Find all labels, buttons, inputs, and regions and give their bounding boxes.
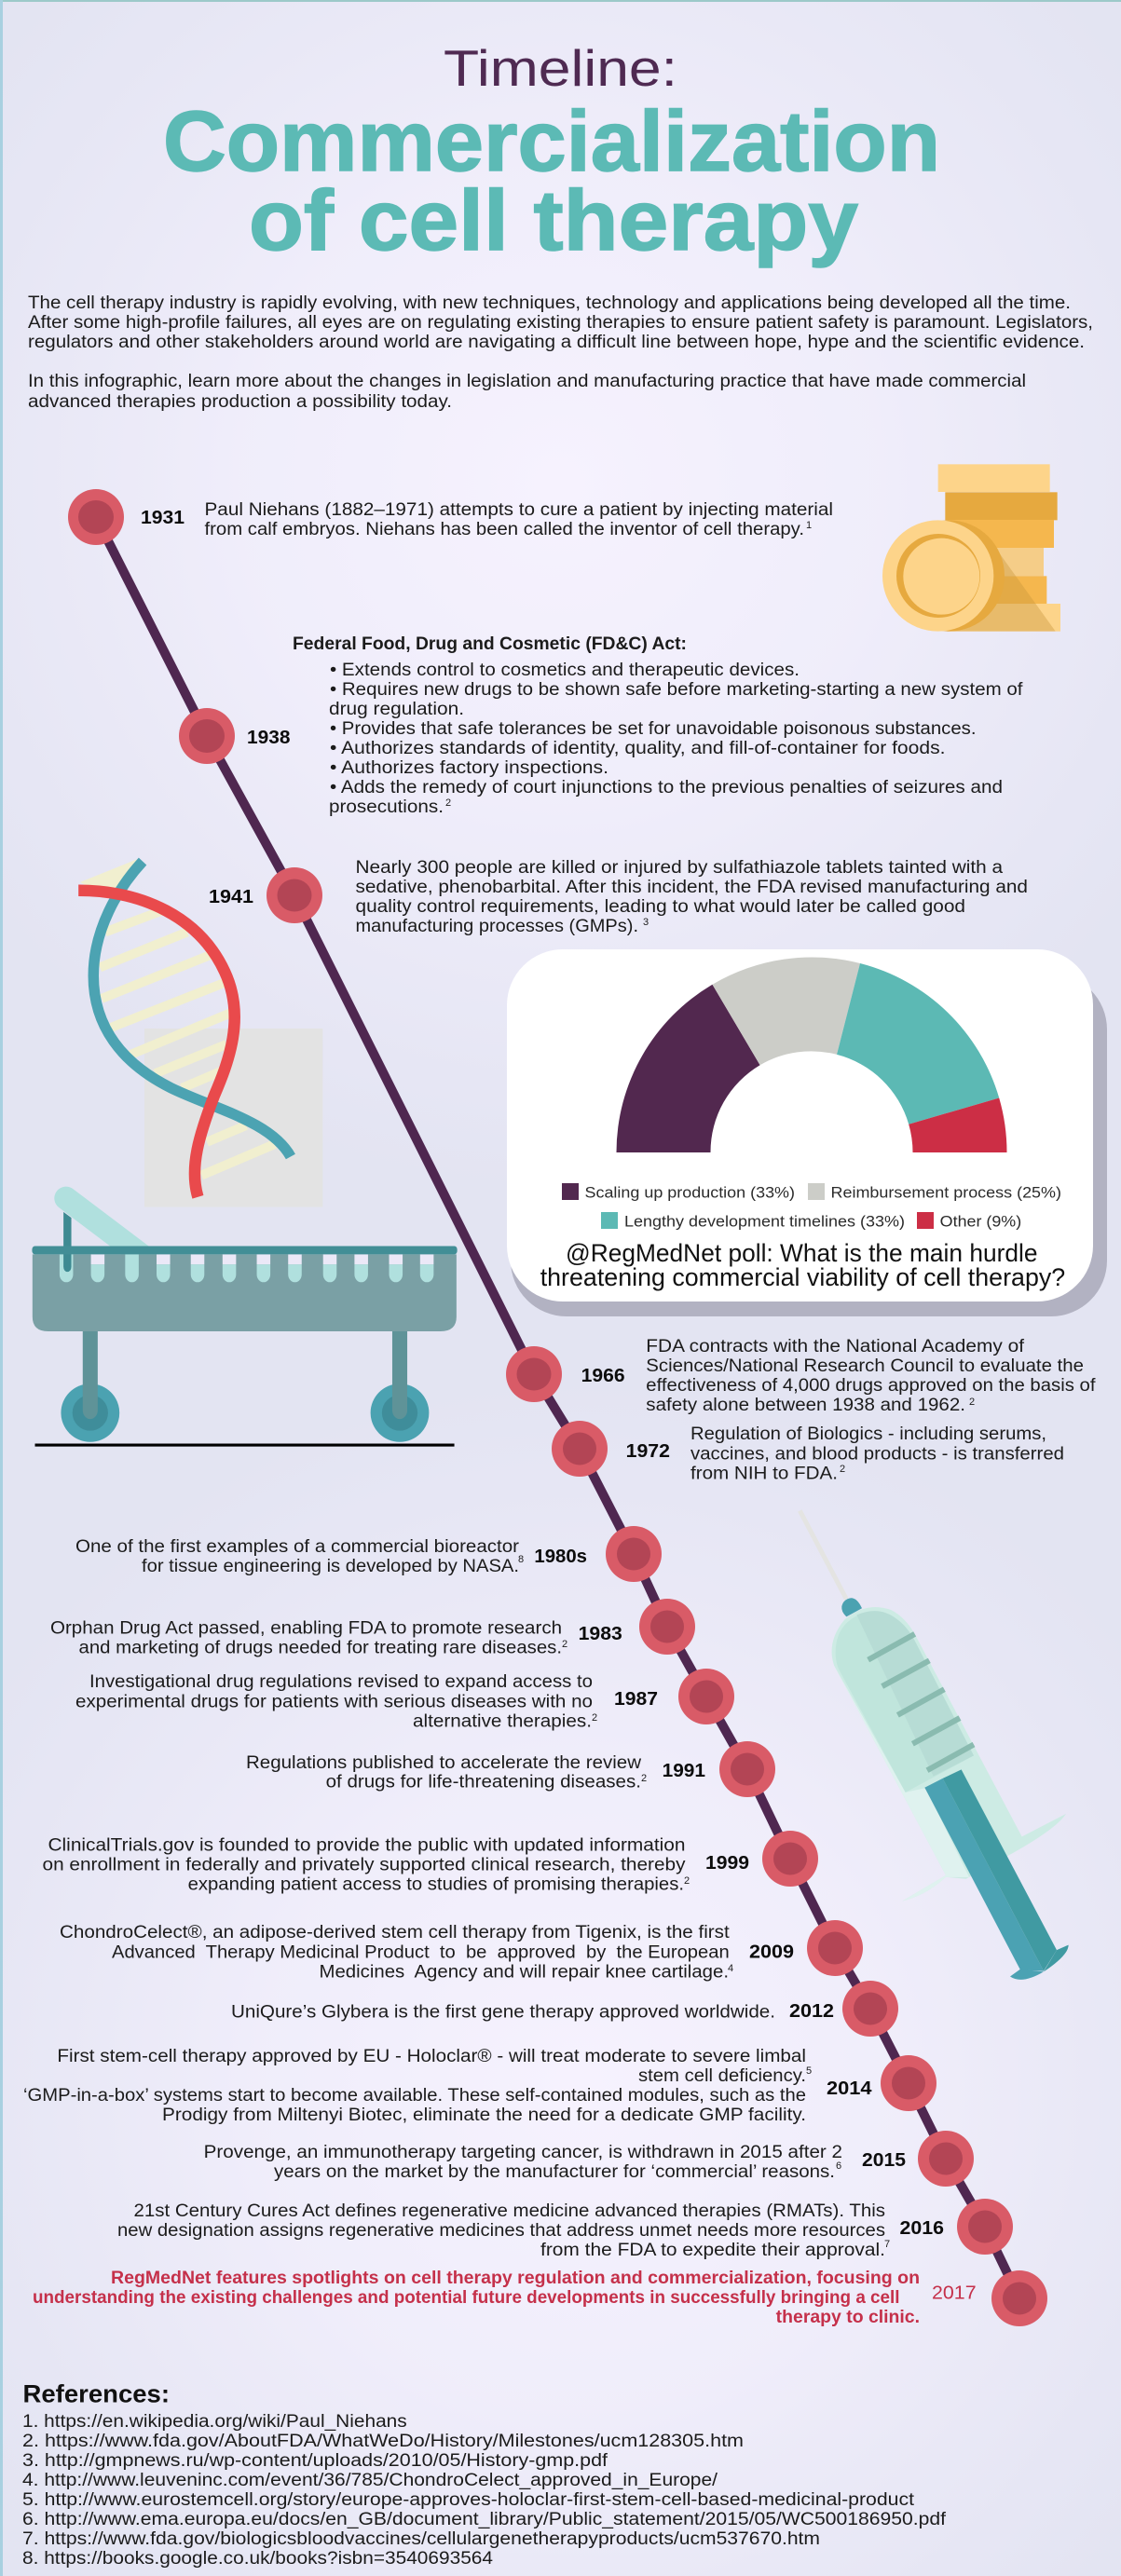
event: 1972 <box>552 1421 1064 1483</box>
event: 1966 <box>506 1337 1096 1415</box>
event: 2017: therapy to clinic. <box>776 2308 920 2327</box>
reference list: 1. https://en.wikipedia.org/wiki/Paul_Niehans <box>22 2412 407 2432</box>
event: 1983: and marketing of drugs needed for treating rare diseases. <box>78 1638 562 1658</box>
event: 2016: 7 <box>884 2239 890 2250</box>
event: 2009: 4 <box>728 1963 733 1974</box>
event: 2017: 2017 <box>932 2283 977 2304</box>
event: 1980s: One of the first examples of a commercial bioreactor <box>75 1537 520 1557</box>
icon: coins <box>882 464 1060 632</box>
event: 1983 <box>50 1599 695 1658</box>
event: 1972: 1972 <box>626 1441 670 1462</box>
event: 1999: expanding patient access to studies of promising therapies. <box>188 1875 684 1895</box>
title: of cell therapy <box>249 173 858 268</box>
event: 1931: from calf embryos. Niehans has been called the inventor of cell therapy. <box>205 520 804 539</box>
node 1931 <box>68 489 124 545</box>
chart legend: Other (9%) <box>940 1213 1021 1230</box>
event: 1972: 2 <box>840 1464 845 1475</box>
intro text: After some high-profile failures, all eyes are on regulating existing therapies to ensure patient safety is paramount. Legislators, <box>28 313 1093 333</box>
event: 2014 <box>23 2047 936 2125</box>
event: 1991 <box>246 1741 775 1797</box>
event: 1980s: for tissue engineering is developed by NASA. <box>142 1557 519 1576</box>
node 2015 <box>918 2131 974 2187</box>
intro text: regulators and other stakeholders around world are navigating a difficult line between hope, hype and the scientific evidence. <box>28 333 1085 352</box>
event: 1938 FD&C Act: • Requires new drugs to be shown safe before marketing-starting a new system of <box>330 680 1023 700</box>
event: 1991: Regulations published to accelerate the review <box>246 1753 641 1773</box>
event: 1966: 2 <box>969 1397 975 1408</box>
references heading: References: <box>22 2379 170 2407</box>
intro text: advanced therapies production a possibility today. <box>28 392 452 412</box>
reference list: 4. http://www.leuveninc.com/event/36/785/ChondroCelect_approved_in_Europe/ <box>22 2471 718 2490</box>
event: 1931: 1 <box>806 520 812 531</box>
event: 1999: 2 <box>684 1875 690 1887</box>
event: 1966: safety alone between 1938 and 1962. <box>646 1396 965 1415</box>
poll question: @RegMedNet poll: What is the main hurdle <box>566 1239 1038 1267</box>
event: 2009: Advanced Therapy Medicinal Product to be approved by the European <box>112 1942 730 1962</box>
event: 2012 <box>231 1981 898 2037</box>
chart legend: Reimbursement process (25%) <box>831 1183 1061 1202</box>
node 2017 <box>991 2270 1047 2326</box>
reference list <box>22 2412 947 2569</box>
node 2014 <box>881 2055 936 2111</box>
event: 2009: ChondroCelect®, an adipose-derived stem cell therapy from Tigenix, is the first <box>60 1923 730 1942</box>
event: 2015: Provenge, an immunotherapy targeting cancer, is withdrawn in 2015 after 2 <box>204 2143 842 2162</box>
event: 1938 FD&C Act: • Adds the remedy of court injunctions to the previous penalties of seizures and <box>330 778 1003 797</box>
node 1980s <box>606 1526 662 1582</box>
chart legend: Scaling up production (33%) <box>585 1183 795 1202</box>
node 1941 <box>267 867 322 923</box>
event: 1972: vaccines, and blood products - is transferred <box>690 1444 1064 1465</box>
icon: syringe <box>800 1511 1069 1980</box>
event: 1991: 2 <box>641 1773 647 1784</box>
event: 2014: 5 <box>806 2065 812 2077</box>
chart legend: Lengthy development timelines (33%) <box>624 1213 905 1230</box>
event: 1941: Nearly 300 people are killed or injured by sulfathiazole tablets tainted with a <box>356 858 1003 878</box>
event: 1938 FD&C Act: • Provides that safe tolerances be set for unavoidable poisonous substances. <box>330 719 977 739</box>
event: 1938 FD&C Act: • Authorizes standards of identity, quality, and fill-of-container for foods. <box>330 739 945 758</box>
event: 1980s: 8 <box>518 1554 524 1565</box>
event: 1983: 2 <box>562 1639 567 1650</box>
event: 1991: 1991 <box>663 1761 705 1781</box>
event: 1938 FD&C Act: 2 <box>445 797 451 809</box>
event: 1987 <box>75 1669 734 1731</box>
panel: poll chart <box>507 949 1107 1316</box>
event: 1987: alternative therapies. <box>413 1712 592 1731</box>
event: 1966: 1966 <box>581 1366 625 1386</box>
event: 2014: stem cell deficiency. <box>638 2066 806 2086</box>
event: 1941: sedative, phenobarbital. After this incident, the FDA revised manufacturing and <box>356 878 1028 897</box>
event: 2012: 2012 <box>789 2001 834 2022</box>
poll question <box>540 1239 1065 1291</box>
reference list: 3. http://gmpnews.ru/wp-content/uploads/2010/05/History-gmp.pdf <box>22 2451 608 2471</box>
node 1966 <box>506 1346 562 1402</box>
node 1999 <box>762 1831 818 1887</box>
event: 1938 FD&C Act <box>179 634 1023 817</box>
event: 2015 <box>204 2131 974 2187</box>
event: 2015: years on the market by the manufacturer for ‘commercial’ reasons. <box>274 2162 835 2182</box>
event: 1938 FD&C Act: prosecutions. <box>329 797 444 817</box>
event: 1999: ClinicalTrials.gov is founded to provide the public with updated information <box>48 1835 686 1855</box>
event: 1966: FDA contracts with the National Academy of <box>646 1337 1025 1356</box>
icon: hospital stretcher <box>32 1198 458 1447</box>
event: 1941: 1941 <box>209 887 253 907</box>
event: 1987: Investigational drug regulations revised to expand access to <box>89 1672 593 1692</box>
event: 2014: Prodigy from Miltenyi Biotec, eliminate the need for a dedicate GMP facility. <box>162 2106 806 2125</box>
node 2009 <box>807 1920 863 1976</box>
event: 1991: of drugs for life-threatening diseases. <box>326 1773 641 1792</box>
event: 1931: 1931 <box>141 508 185 528</box>
reference list: 8. https://books.google.co.uk/books?isbn=3540693564 <box>22 2549 493 2569</box>
event: 2014: First stem-cell therapy approved by EU - Holoclar® - will treat moderate to severe limbal <box>57 2047 806 2066</box>
event: 1938 FD&C Act: 1938 <box>247 728 291 748</box>
event: 1941: 3 <box>643 917 649 928</box>
event: 1983: Orphan Drug Act passed, enabling FDA to promote research <box>50 1619 562 1638</box>
event: 1966: effectiveness of 4,000 drugs approved on the basis of <box>646 1376 1096 1396</box>
title: Timeline: <box>444 39 677 97</box>
timeline line <box>96 517 1019 2298</box>
node 1972 <box>552 1421 608 1477</box>
event: 1931: Paul Niehans (1882–1971) attempts to cure a patient by injecting material <box>205 500 833 520</box>
event: 1938 FD&C Act: Federal Food, Drug and Cosmetic (FD&C) Act: <box>293 634 687 654</box>
event: 1938 FD&C Act: • Extends control to cosmetics and therapeutic devices. <box>330 661 800 680</box>
event: 2017 <box>33 2269 1047 2327</box>
event: 1999: 1999 <box>705 1853 749 1874</box>
event: 2012: UniQure’s Glybera is the first gene therapy approved worldwide. <box>231 2003 775 2023</box>
poll question: threatening commercial viability of cell therapy? <box>540 1263 1065 1291</box>
event: 2015: 2015 <box>862 2150 906 2171</box>
event: 1987: experimental drugs for patients with serious diseases with no <box>75 1692 593 1712</box>
icon: DNA helix <box>78 858 322 1207</box>
node 2012 <box>842 1981 898 2037</box>
chart legend <box>562 1183 1061 1230</box>
intro text: The cell therapy industry is rapidly evolving, with new techniques, technology and applications being developed all the time. <box>28 293 1071 313</box>
event: 1941: manufacturing processes (GMPs). <box>356 917 638 936</box>
event: 2017: RegMedNet features spotlights on cell therapy regulation and commercialization, focusing on <box>111 2269 920 2288</box>
event: 2009 <box>60 1920 863 1983</box>
event: 1941 <box>209 858 1028 936</box>
event: 1931 <box>68 489 833 545</box>
event: 2017: understanding the existing challenges and potential future developments in successfully bringing a cell <box>33 2288 900 2308</box>
event: 2015: 6 <box>836 2160 841 2172</box>
event: 2014: ‘GMP-in-a-box’ systems start to become available. These self-contained modules, such as the <box>23 2086 806 2106</box>
event: 1972: from NIH to FDA. <box>690 1465 838 1483</box>
node 1983 <box>639 1599 695 1655</box>
event: 1972: Regulation of Biologics - including serums, <box>690 1424 1046 1444</box>
event: 1938 FD&C Act: drug regulation. <box>329 700 464 719</box>
semi-donut chart <box>617 957 1006 1152</box>
reference list: 2. https://www.fda.gov/AboutFDA/WhatWeDo/History/Milestones/ucm128305.htm <box>22 2432 744 2451</box>
title: Commercialization <box>163 94 940 189</box>
event: 2016: 21st Century Cures Act defines regenerative medicine advanced therapies (RMATs). This <box>134 2201 885 2221</box>
node 1987 <box>678 1669 734 1724</box>
event: 1938 FD&C Act: • Authorizes factory inspections. <box>330 758 608 778</box>
event: 2014: 2014 <box>827 2079 872 2099</box>
node 2016 <box>957 2199 1013 2255</box>
event: 2016: new designation assigns regenerative medicines that address unmet needs more resources <box>117 2221 885 2241</box>
event: 1941: quality control requirements, leading to what would later be called good <box>356 897 965 917</box>
event: 1987: 2 <box>592 1712 597 1724</box>
event: 1966: Sciences/National Research Council to evaluate the <box>646 1356 1084 1376</box>
event: 2016: 2016 <box>900 2218 944 2239</box>
intro text <box>28 293 1093 412</box>
intro text: In this infographic, learn more about the changes in legislation and manufacturing practice that have made commercial <box>28 372 1026 391</box>
event: 2016: from the FDA to expedite their approval. <box>540 2241 885 2260</box>
event: 1980s <box>75 1526 662 1582</box>
event: 1987: 1987 <box>614 1689 658 1710</box>
event: 1983: 1983 <box>579 1624 622 1644</box>
node 1938 <box>179 708 235 764</box>
references <box>22 2379 947 2569</box>
reference list: 5. http://www.eurostemcell.org/story/europe-approves-holoclar-first-stem-cell-based-medicinal-product <box>22 2490 915 2510</box>
reference list: 7. https://www.fda.gov/biologicsbloodvaccines/cellulargenetherapyproducts/ucm537670.htm <box>22 2529 820 2549</box>
event: 2009: 2009 <box>749 1942 794 1962</box>
node 1991 <box>719 1741 775 1797</box>
event: 2009: Medicines Agency and will repair knee cartilage. <box>319 1962 729 1983</box>
event: 1999: on enrollment in federally and privately supported clinical research, thereby <box>43 1856 686 1874</box>
event: 1980s: 1980s <box>534 1547 587 1567</box>
event: 2016 <box>117 2199 1013 2260</box>
event: 1999 <box>43 1831 818 1895</box>
title <box>163 39 940 268</box>
reference list: 6. http://www.ema.europa.eu/docs/en_GB/document_library/Public_statement/2015/05/WC500186950.pdf <box>22 2510 947 2529</box>
